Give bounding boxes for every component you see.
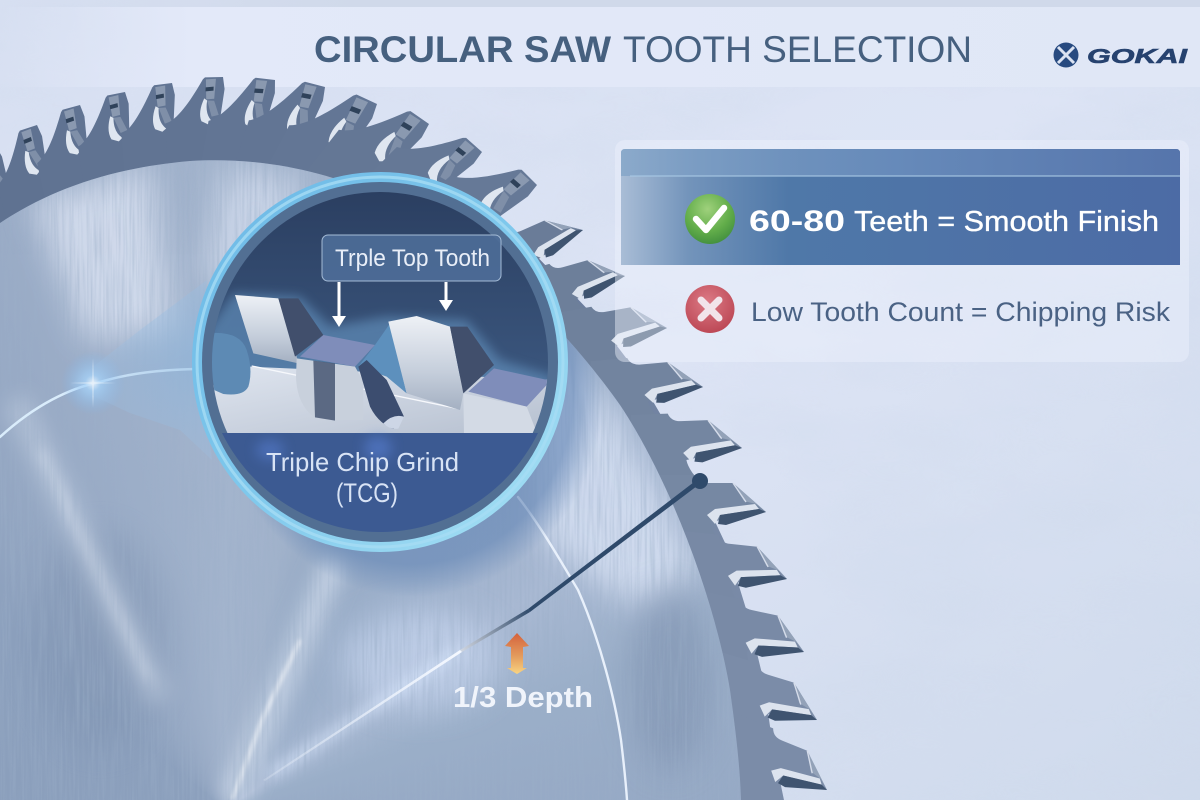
- lens inner ring: [202, 182, 558, 542]
- callout: Triple Top Tooth: Trple Top Tooth: [335, 245, 490, 272]
- info panel: [615, 140, 1189, 362]
- depth label: 1/3 Depth: [453, 682, 593, 714]
- highlighted row: [621, 149, 1180, 265]
- glow between teeth: [358, 323, 407, 393]
- caption: Triple Chip Grind (TCG): (TCG): [336, 478, 398, 508]
- callout: Triple Top Tooth: [322, 235, 501, 281]
- row text: chipping risk: Low Tooth Count = Chipping Risk: [751, 297, 1171, 327]
- magnified teeth illustration: [203, 293, 553, 435]
- bright ring line on disc: [0, 369, 627, 800]
- icon: green check: [685, 194, 735, 244]
- lens interior: [212, 192, 548, 532]
- arrow to left tooth: [332, 282, 346, 327]
- lens connector cone: [70, 280, 212, 460]
- blade rim: [0, 117, 785, 800]
- depth line: [263, 473, 708, 781]
- title: TOOTH SELECTION: [623, 28, 972, 70]
- depth arrow: [505, 633, 529, 674]
- row text: smooth finish: [749, 205, 1159, 238]
- logo mark: [1054, 42, 1078, 68]
- logo: [1054, 42, 1188, 68]
- magnifier lens: [192, 172, 568, 552]
- title: [314, 28, 972, 70]
- row text: smooth finish: Teeth = Smooth Finish: [854, 206, 1159, 238]
- left tooth face: [235, 295, 298, 363]
- saw teeth: [0, 68, 841, 800]
- caption: Triple Chip Grind (TCG): Triple Chip Grind: [266, 447, 459, 477]
- polished blade disc: [0, 160, 741, 800]
- light flare on ring: [61, 351, 125, 415]
- right tooth face: [388, 316, 463, 410]
- title: CIRCULAR SAW: [314, 28, 612, 70]
- lens outer ring: [192, 172, 568, 552]
- bottom caption strip: [222, 433, 538, 532]
- row text: smooth finish: 60-80: [749, 205, 845, 238]
- gullet between teeth: [358, 360, 404, 429]
- arrow to right tooth: [439, 282, 453, 311]
- polished highlights and brushed texture on disc: [0, 150, 760, 800]
- logo: GOKAI: [1087, 46, 1188, 68]
- icon: red cross: [686, 285, 734, 333]
- lens shadow: [266, 338, 599, 590]
- blue glow behind teeth: [212, 289, 548, 380]
- caption: Triple Chip Grind (TCG): [266, 447, 459, 508]
- title band: [0, 7, 1200, 87]
- metal plate: [210, 367, 553, 435]
